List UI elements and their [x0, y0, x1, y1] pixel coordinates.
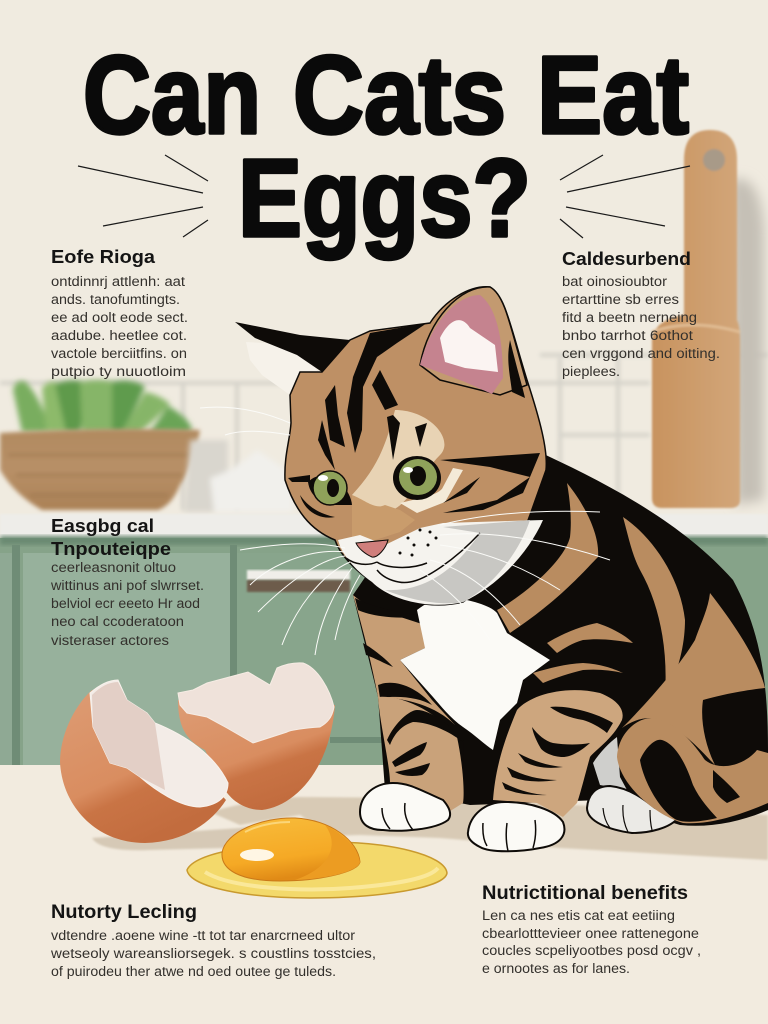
text block: top left: putpio ty nuuotloim — [51, 364, 186, 379]
text block: bottom right: e ornootes as for lanes. — [482, 961, 630, 976]
muzzle and cheek — [338, 520, 543, 605]
text block: bottom right: Nutrictitional benefits — [482, 882, 688, 904]
countertop — [0, 765, 768, 1024]
cabinets — [0, 536, 768, 766]
text block: bottom right: Len ca nes etis cat eat eetiing — [482, 908, 675, 923]
text block: top left: Eofe Rioga — [51, 247, 156, 267]
title: Eat — [537, 34, 689, 157]
basket — [0, 429, 200, 510]
text block: top right: cen vrggond and oitting. — [562, 346, 720, 361]
cat illustration — [200, 287, 768, 851]
emphasis lines left — [78, 155, 208, 237]
nose bridge — [352, 495, 415, 540]
text block: top left — [51, 247, 188, 379]
whiskers — [200, 407, 610, 655]
text block: top right: fitd a beetn nerneing — [562, 310, 697, 325]
cracked eggshells — [60, 663, 335, 843]
text block: top left: aadube. heetlee cot. — [51, 328, 187, 343]
left ear dark — [235, 322, 350, 372]
wall tiles — [0, 355, 768, 510]
whisker dots — [398, 528, 438, 556]
text block: top right — [562, 249, 720, 379]
text block: middle left: Easgbg cal — [51, 516, 154, 536]
text block: middle left: ceerleasnonit oltuo — [51, 560, 176, 575]
text block: top left: ontdinnrj attlenh: aat — [51, 274, 185, 289]
text block: bottom right: cbearlotttevieer onee rattenegone — [482, 926, 699, 941]
right eye — [393, 456, 441, 500]
text block: bottom left: of puirodeu ther atwe nd oed outee ge tuleds. — [51, 964, 336, 979]
left front leg — [360, 697, 497, 831]
title — [83, 34, 689, 260]
mouth — [346, 533, 480, 582]
head — [200, 287, 610, 655]
left egg shell — [60, 680, 228, 843]
white bowl — [184, 440, 293, 512]
text block: middle left: visteraser actores — [51, 633, 169, 648]
title: Can — [83, 34, 261, 157]
cutting board shadow — [730, 179, 764, 505]
left paw — [360, 783, 450, 831]
light forehead area — [352, 410, 444, 518]
greens in basket — [13, 380, 192, 432]
text block: top right: bat oinosioubtor — [562, 274, 668, 289]
text block: middle left: wittinus ani pof slwrrset. — [50, 578, 204, 593]
grey belly — [593, 737, 627, 790]
emphasis lines right — [560, 155, 690, 238]
text block: bottom right — [482, 882, 701, 976]
counter ledge — [0, 514, 768, 538]
title: Cats — [293, 34, 506, 157]
cabinet handle — [247, 570, 350, 580]
rear paw — [587, 786, 678, 833]
right ear inner — [420, 295, 503, 394]
white chest — [400, 597, 550, 750]
left ear fringe — [246, 342, 320, 410]
text block: middle left: belviol ecr eeeto Hr aod — [51, 596, 200, 611]
tan fur bands — [497, 483, 765, 765]
egg white puddle — [187, 842, 447, 898]
shoulder stripes — [355, 598, 432, 705]
tail — [617, 718, 768, 823]
text block: bottom left: Nutorty Lecling — [51, 901, 197, 923]
under eye light patch — [400, 468, 463, 513]
right egg shell — [178, 663, 335, 810]
title: Eggs? — [238, 137, 531, 260]
right front leg — [468, 690, 623, 851]
text block: top left: ee ad oolt eode sect. — [51, 310, 188, 325]
face side stripes — [288, 453, 540, 518]
text block: middle left — [50, 516, 204, 648]
text block: middle left: neo cal ccoderatoon — [51, 614, 184, 629]
forehead stripes — [318, 323, 427, 470]
body silhouette — [353, 450, 768, 826]
left eye — [308, 471, 352, 505]
text block: top right: ertarttine sb erres — [562, 292, 679, 307]
text block: bottom left: vdtendre .aoene wine -tt tot tar enarcrneed ultor — [51, 928, 356, 943]
left shoulder fur — [353, 595, 455, 725]
text block: top left: ands. tanofumtingts. — [51, 292, 180, 307]
counter shadow — [210, 797, 768, 860]
text block: top right: Caldesurbend — [562, 249, 691, 269]
text block: bottom left: wetseoly wareansliorsegek. s coustlins tosstcies, — [50, 946, 376, 961]
yolk — [222, 818, 360, 881]
ear edge stripe — [508, 340, 525, 398]
egg shadow — [92, 818, 300, 850]
ear rim tan — [420, 287, 527, 395]
egg puddle — [187, 818, 447, 898]
text block: middle left: Tnpouteiqpe — [51, 539, 171, 559]
text block: top right: pieplees. — [562, 364, 620, 379]
puddle highlight — [205, 868, 438, 889]
text block: top right: bnbo tarrhot 6othot — [562, 328, 693, 343]
right paw — [468, 802, 564, 851]
nose — [356, 540, 388, 557]
text block: top left: vactole berciitfins. on — [51, 346, 187, 361]
head shape — [285, 287, 546, 605]
text block: bottom right: coucles scpeliyootbes posd ocgv , — [482, 943, 701, 958]
text block: bottom left — [50, 901, 376, 979]
cutting board — [652, 130, 740, 508]
